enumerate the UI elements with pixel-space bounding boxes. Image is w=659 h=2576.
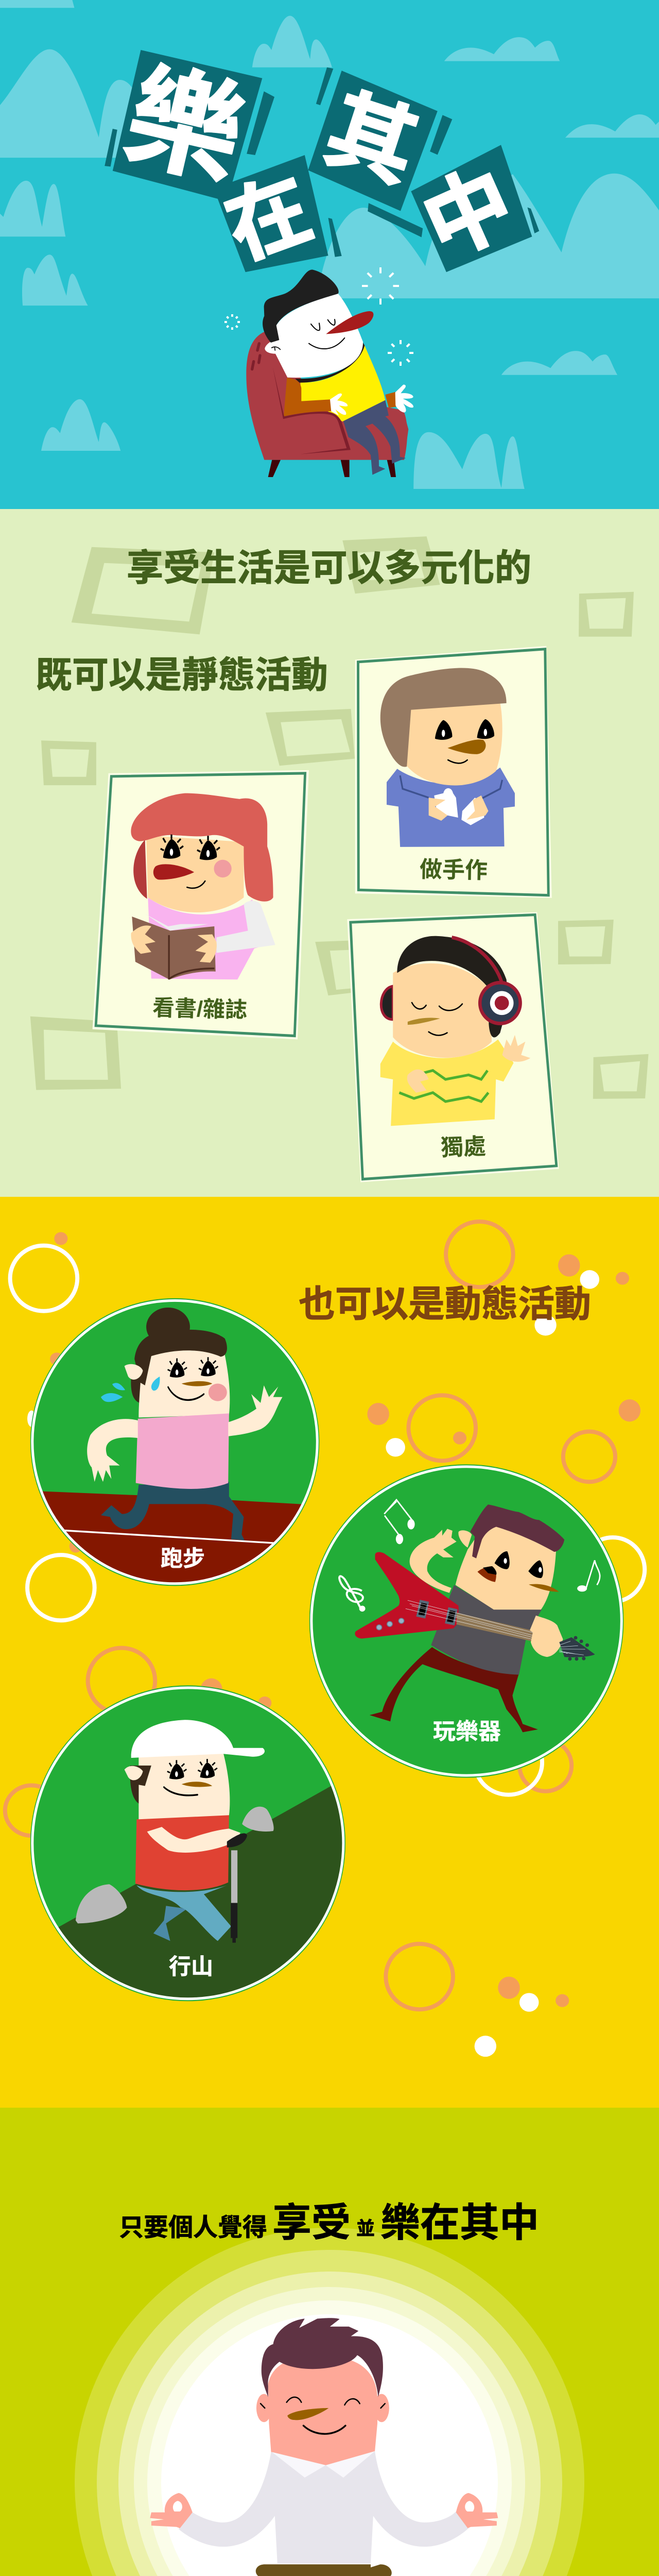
panel: stress relief <box>0 2108 659 2576</box>
title text: 樂 <box>115 51 255 201</box>
figure: meditating man <box>150 2318 498 2576</box>
circle: running <box>25 1298 319 1605</box>
headline line: 享受 <box>272 2201 351 2245</box>
card: handicraft <box>355 646 552 898</box>
circle: playing instrument <box>309 1464 623 1778</box>
card: handicraft: 做手作 <box>420 857 488 884</box>
heading: enjoying life: 享受生活是可以多元化的 <box>127 548 531 589</box>
card: reading <box>93 770 309 1040</box>
headline line <box>119 2201 539 2245</box>
panel: dynamic activities <box>0 1197 659 2108</box>
title text: 中 <box>409 152 528 276</box>
panel: static activities <box>0 509 659 1197</box>
circle: hiking: 行山 <box>169 1955 213 1979</box>
headline line: 樂在其中 <box>380 2201 539 2245</box>
title text: 其 <box>315 79 429 200</box>
headline line: 並 <box>356 2217 375 2239</box>
mountains backdrop <box>0 0 659 489</box>
card: reading: 看書/雜誌 <box>152 996 248 1023</box>
concentric glow <box>75 2228 584 2576</box>
decorative rings and dots <box>5 1222 645 2057</box>
figure: man relaxing in armchair <box>246 269 413 477</box>
title text: 在 <box>214 161 323 276</box>
panel: hero <box>0 0 659 509</box>
circle: playing instrument: 玩樂器 <box>433 1719 501 1744</box>
heading: dynamic activities: 也可以是動態活動 <box>299 1284 591 1325</box>
heading: static activities: 既可以是靜態活動 <box>36 655 328 696</box>
circle: hiking <box>25 1685 353 2014</box>
card: being alone <box>347 912 559 1182</box>
decorative frames <box>30 536 649 1099</box>
circle: running: 跑步 <box>161 1547 205 1571</box>
sparkles <box>224 267 413 366</box>
title tiles <box>105 50 539 272</box>
headline line: 只要個人覺得 <box>119 2214 267 2241</box>
title text <box>115 51 528 276</box>
card: being alone: 獨處 <box>440 1134 487 1161</box>
